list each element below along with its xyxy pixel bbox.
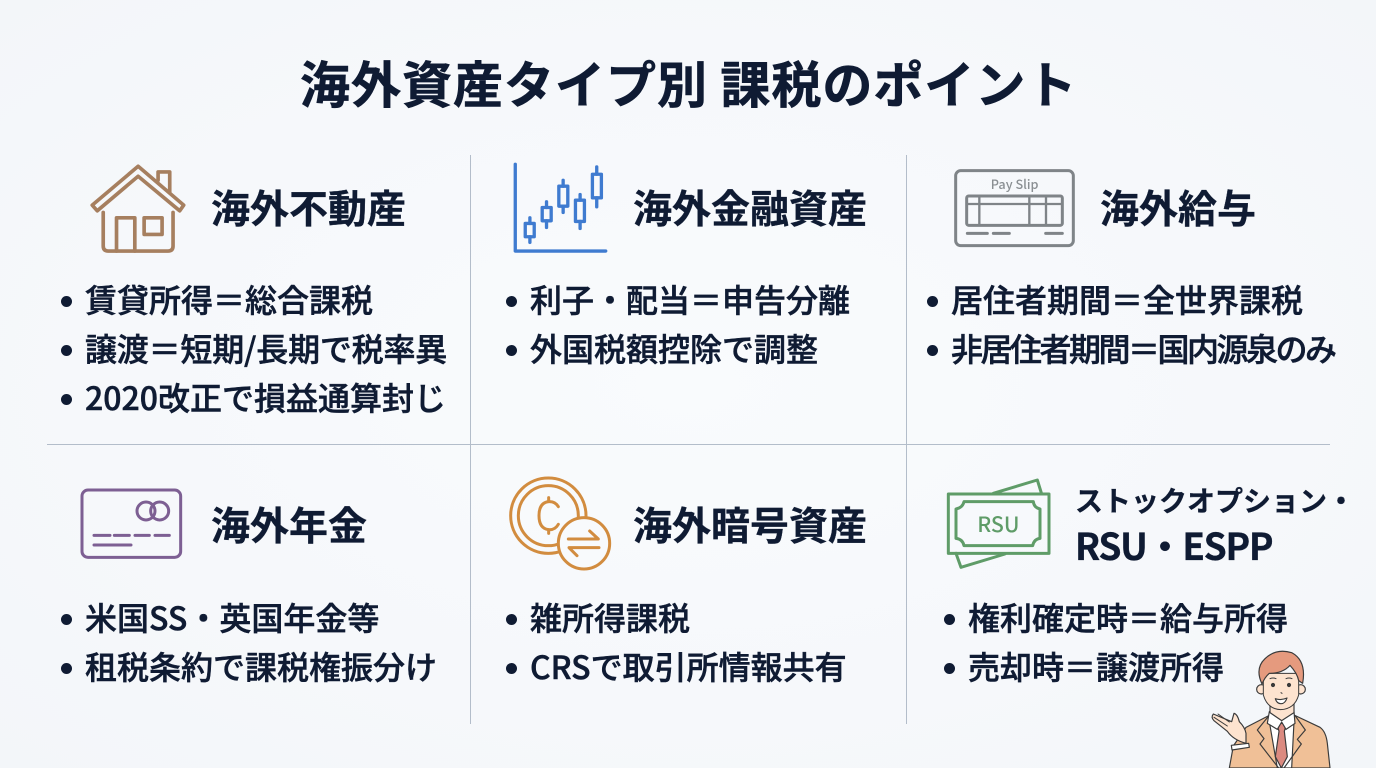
icon: house [90,164,186,253]
panel: 海外不動産 [61,164,447,420]
panel: 海外暗号資産 [506,476,867,689]
eyes / nose / mouth [1272,684,1274,686]
suit [1229,715,1330,768]
bullet: 売却時＝譲渡所得 [968,643,1224,689]
collar [1267,712,1295,729]
bullet: 2020改正で損益通算封じ [85,374,446,420]
heading: 海外不動産 [211,179,406,235]
heading: 海外年金 [211,496,367,552]
face [1263,673,1299,710]
bullet: 外国税額控除で調整 [530,325,818,371]
icon: banknotes: RSU [977,508,1019,539]
illustration: presenter [1212,650,1331,768]
bullet: 米国SS・英国年金等 [85,594,379,640]
bullet: 権利確定時＝給与所得 [968,594,1288,640]
icon: pay slip [954,169,1075,248]
panel: 海外年金 [61,488,437,689]
heading: 海外給与 [1100,179,1256,235]
icon: coin exchange [509,476,612,570]
shirt [1269,722,1294,768]
heading: RSU・ESPP [1075,517,1272,571]
tie [1275,723,1287,768]
hair [1259,651,1304,684]
hand [1212,713,1246,743]
panel: 海外金融資産 [506,162,867,371]
icon: banknotes [946,478,1050,569]
panel: 海外給与 [927,169,1336,371]
bullet: 雑所得課税 [530,594,690,640]
heading: ストックオプション・ [1075,480,1355,520]
icon: candlestick chart [514,162,608,253]
lapels [1257,716,1305,768]
bullet: 賃貸所得＝総合課税 [85,276,373,322]
bullet: 非居住者期間＝国内源泉のみ [951,325,1335,371]
bullet: 譲渡＝短期/長期で税率異 [85,325,447,371]
bullet: 利子・配当＝申告分離 [530,276,850,322]
title: 海外資産タイプ別 課税のポイント [300,46,1077,118]
ears [1257,685,1266,694]
bullet: CRSで取引所情報共有 [530,643,847,689]
heading: 海外金融資産 [633,179,867,235]
heading: 海外暗号資産 [633,496,867,552]
cuff [1231,743,1249,750]
panel: ストックオプション・RSU・ESPP [944,478,1355,689]
neck [1270,702,1294,721]
bullet: 租税条約で課税権振分け [85,643,437,689]
icon: card [80,488,182,559]
bullet: 居住者期間＝全世界課税 [951,276,1303,322]
icon: pay slip: Pay Slip [991,174,1039,193]
